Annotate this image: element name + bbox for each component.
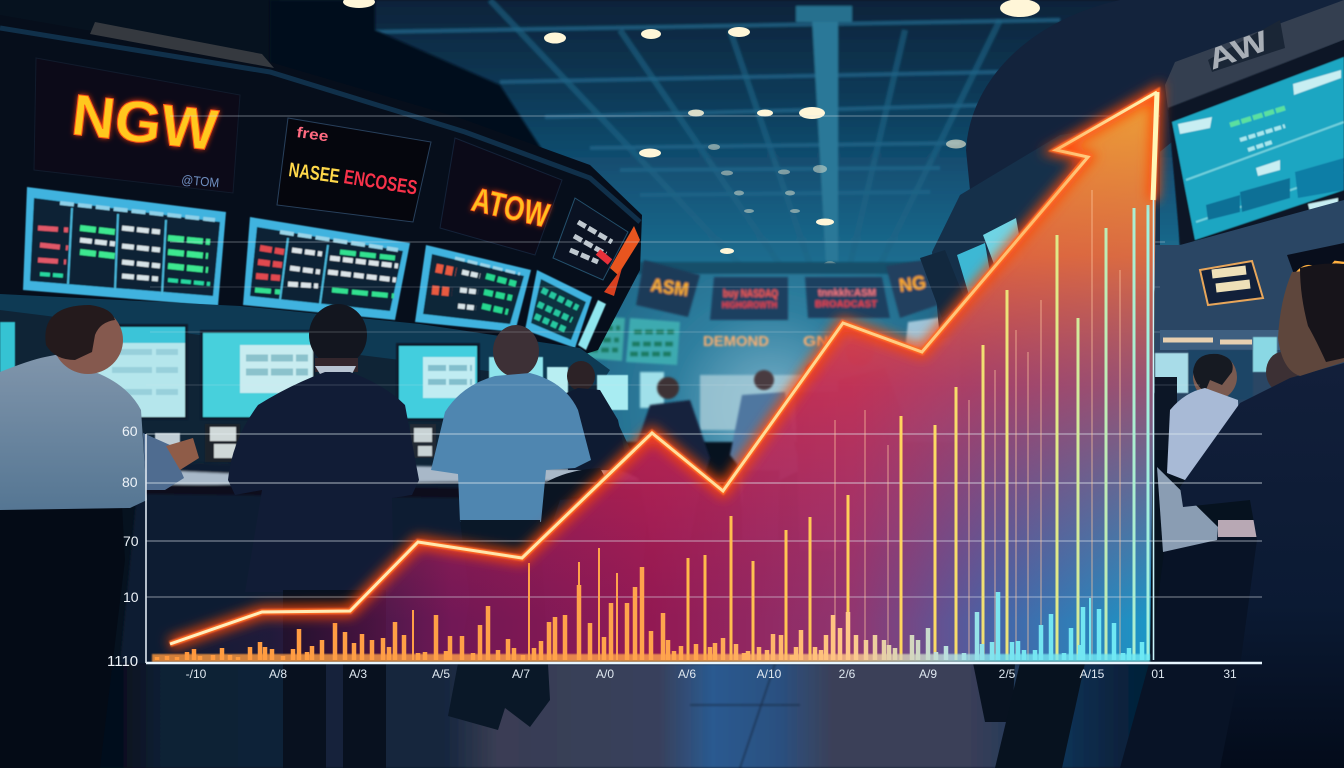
desk: [120, 462, 650, 664]
person: right back in pale shirt: [973, 354, 1257, 768]
far sign: second banner: GNIL ITTE: [803, 333, 885, 350]
wall band and lights: [1160, 330, 1280, 350]
y axis labels: 1110: [107, 653, 138, 670]
rising line: [170, 92, 1157, 644]
ticker screen 3: [415, 245, 531, 332]
sign panel: NGW: NGW: [69, 82, 221, 163]
far screens: [583, 316, 950, 430]
large right screen: [1168, 40, 1344, 245]
grid lines: [146, 116, 1200, 385]
people: [0, 264, 1344, 768]
sign panel: NGW: NGW: [69, 82, 221, 163]
x axis labels: A/3: [349, 667, 367, 681]
person: behind right foreground: [1266, 352, 1298, 392]
dark upper-left block: [270, 0, 552, 165]
monitor center right: [396, 343, 480, 421]
x axis labels: A/8: [269, 667, 287, 681]
x axis labels: 2/6: [839, 667, 856, 681]
rising chart overlay: [107, 92, 1262, 681]
left upper structure: [0, 15, 650, 664]
person: dark suit at back: [560, 361, 626, 470]
far signs and screens: [583, 260, 950, 430]
sign panel: ATOW: [440, 138, 562, 255]
ceiling: [280, 0, 1180, 290]
far sign: red ticker left: buy NASDAQ: [723, 288, 778, 300]
far sign: red ticker left: HIGHGROWTH: [722, 300, 777, 310]
monitor center left: [200, 330, 316, 420]
sign panel: Nasee Encoses: ENCOSES: [342, 166, 419, 200]
sign panel: angled small: [553, 198, 640, 296]
x axis labels: 01: [1151, 667, 1165, 681]
rising line glow: [170, 92, 1157, 644]
far sign: orange: [636, 260, 700, 317]
x axis labels: [186, 667, 1237, 681]
sign panel: Nasee Encoses: free: [295, 124, 329, 145]
arrow right edge: [1154, 200, 1155, 660]
sign panel: ATOW: ATOW: [468, 181, 553, 235]
far sign: demond: DEMOND: [703, 333, 769, 350]
far sign: red ticker left: [710, 277, 788, 320]
far sign: orange right: [886, 260, 938, 318]
right structure: [920, 0, 1344, 420]
axes: [146, 434, 1262, 663]
grey header with AW: [1165, 0, 1344, 110]
y axis labels: 70: [123, 533, 139, 549]
ticker screen 1: [23, 187, 226, 306]
ceiling lights: [343, 0, 1040, 266]
x axis labels: A/10: [757, 667, 782, 681]
monitor left: [92, 324, 188, 420]
y axis labels: 80: [122, 474, 138, 490]
person: right foreground suit: [1180, 264, 1344, 768]
curved wall: [966, 0, 1344, 190]
person: left man in grey shirt: [0, 305, 199, 768]
sign panel: NGW: [34, 58, 240, 193]
grey header with AW: AW: [1203, 25, 1273, 77]
lower right panel: [1155, 200, 1344, 420]
gold wave sign: [1287, 243, 1344, 277]
baseline glow band: [152, 654, 1150, 662]
ticker screen 2: [243, 217, 410, 320]
distant crowd: [632, 338, 905, 550]
y axis labels: 60: [122, 423, 138, 439]
x axis labels: -/10: [186, 667, 207, 681]
x axis labels: 31: [1223, 667, 1237, 681]
monitors row: [0, 322, 628, 462]
x axis labels: A/5: [432, 667, 450, 681]
ticker screen 4: [525, 270, 606, 350]
far sign: red ticker right: tnnkkh:ASM: [818, 288, 876, 299]
sign panel: Nasee Encoses: [277, 118, 431, 222]
x axis labels: 2/5: [999, 667, 1016, 681]
back-right monitors: [1155, 337, 1277, 400]
sign panel: ATOW: ATOW: [468, 181, 553, 235]
y axis labels: 10: [123, 589, 139, 605]
top fascia highlight: [90, 22, 274, 68]
x axis labels: A/9: [919, 667, 937, 681]
far back wall: [580, 262, 960, 442]
faint thin bars: [835, 190, 1120, 660]
x axis labels: A/6: [678, 667, 696, 681]
tall bars: [688, 205, 1148, 660]
far sign: orange right: NG: [898, 272, 927, 297]
far sign: orange: ASM: [649, 275, 690, 301]
person: dark suit: [228, 304, 419, 768]
x axis labels: A/7: [512, 667, 530, 681]
x axis labels: A/15: [1080, 667, 1105, 681]
horizontal gridlines over chart: [146, 434, 1262, 597]
person: blue shirt: [431, 325, 612, 730]
far sign: red ticker right: [805, 277, 890, 318]
gold sign: [1200, 261, 1263, 305]
small bars: [157, 548, 1142, 660]
floor: [0, 664, 1344, 768]
sign panel: Nasee Encoses: NASEE: [287, 159, 341, 188]
angled side screens: [920, 218, 1024, 318]
console shelf: [0, 294, 610, 385]
chart area fill: [150, 92, 1157, 660]
y axis labels: [107, 423, 139, 670]
sign panel: NGW: @TOM: [181, 172, 220, 190]
x axis labels: A/0: [596, 667, 614, 681]
far sign: red ticker right: BROADCAST: [815, 299, 878, 309]
